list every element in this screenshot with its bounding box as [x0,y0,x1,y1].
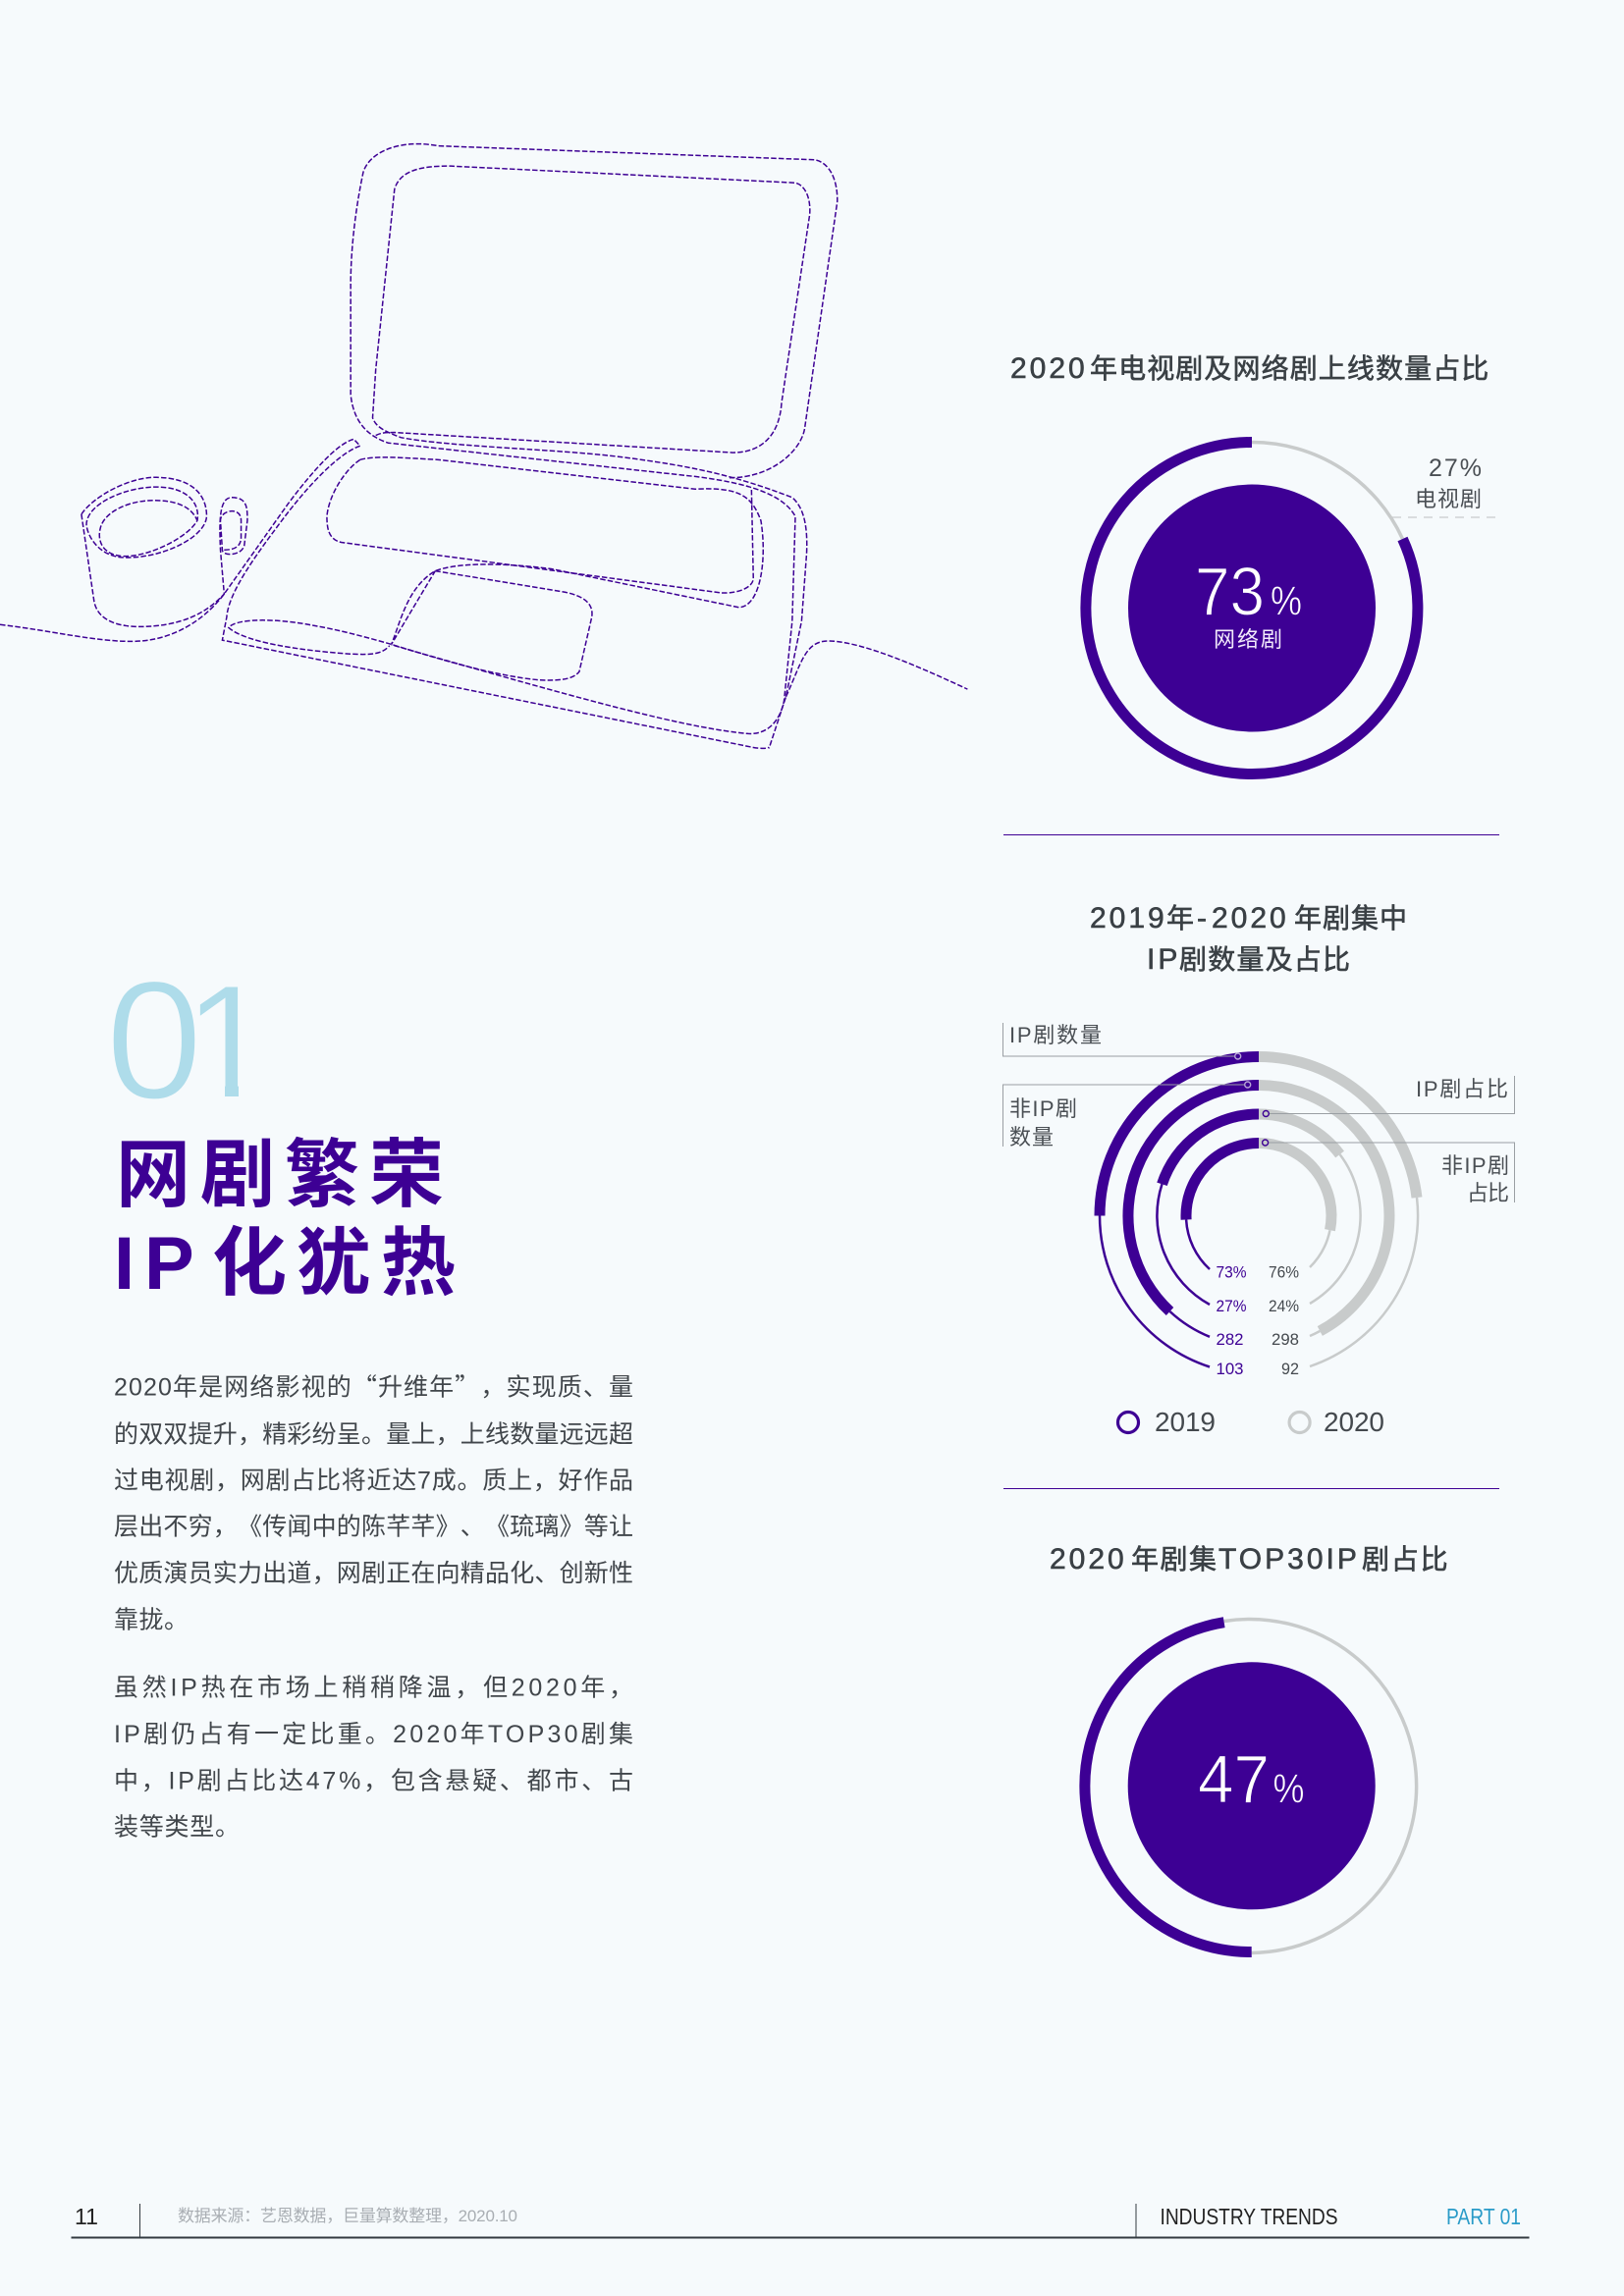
ring chart values 2020: 24% [1269,1297,1299,1315]
paragraph 1: 2020年是网络影视的“升维年”，实现质、量 [114,1368,633,1404]
chart title: IP drama count and share: 年剧集中 [1294,903,1408,934]
heading line 1: 网剧繁荣 [116,1134,444,1217]
footer rule [71,2236,1530,2238]
donut chart: 47% [1085,1620,1417,1953]
heading [114,1134,456,1306]
ring chart labels: 数量 [1009,1125,1054,1149]
concentric ring chart [1003,1023,1514,1366]
ring chart values 2019: 282 [1216,1330,1243,1349]
ring chart labels: IP剧数量 [1009,1023,1102,1047]
body text [114,1368,633,1841]
paragraph 2 [114,1675,633,1841]
paragraph 1: 的双双提升，精彩纷呈。量上，上线数量远远超 [114,1420,633,1448]
ring chart values 2019: 27% [1216,1297,1247,1315]
paragraph 1: 靠拢。 [114,1606,189,1633]
ring: remainder [1224,1620,1417,1953]
section number 01 [106,946,274,1135]
center disc [1128,485,1376,732]
paragraph 1 [114,1368,633,1633]
chart title: IP drama count and share: IP [1147,943,1180,976]
chart title: IP drama count and share: 2020 [1212,902,1289,934]
leader lines and dots [1003,1023,1514,1202]
2020 rings [1259,1056,1418,1366]
paragraph 2: 装等类型。 [114,1813,240,1841]
chart title: TOP30 IP share: 剧占比 [1362,1544,1449,1575]
paragraph 1: 过电视剧，网剧占比将近达7成。质上，好作品 [114,1468,633,1495]
ring chart values 2020: 92 [1281,1360,1299,1378]
section number 01: 0 [106,946,202,1135]
value 47: 47 [1198,1741,1270,1818]
label 网络剧: 网络剧 [1214,627,1282,652]
chart title: IP drama count and share: 2019 [1090,902,1167,934]
part label: PART 01 [1446,2204,1521,2229]
paragraph 1: 优质演员实力出道，网剧正在向精品化、创新性 [114,1560,633,1587]
ring chart values 2020: 76% [1269,1262,1299,1282]
ring chart values 2020: 298 [1272,1330,1299,1349]
page number: 11 [75,2204,98,2229]
paragraph 1: 层出不穷，《传闻中的陈芊芊》、《琉璃》等让 [114,1514,633,1541]
ring chart labels: 非IP剧 [1441,1153,1509,1178]
center disc [1128,1662,1376,1909]
ring chart values 2020 [1269,1262,1299,1378]
ring chart values 2019 [1216,1262,1247,1378]
legend 2019: 2019 [1155,1407,1216,1437]
illustration: dashed line laptop and mug [0,144,967,748]
ring: 27% TV drama [1252,442,1402,539]
chart title: IP drama count and share [1090,902,1408,976]
ring chart labels: 占比 [1467,1181,1509,1205]
ring chart labels: 非IP剧 [1009,1096,1077,1121]
2019 rings [1100,1056,1259,1366]
label 电视剧: 电视剧 [1415,487,1482,511]
value 73: 73 [1195,554,1265,630]
chart title: TV vs web drama: 年电视剧及网络剧上线数量占比 [1090,353,1489,384]
chart title: TOP30 IP share: 2020 [1050,1543,1127,1575]
footer [71,2204,1530,2238]
ring chart values 2019: 73% [1216,1262,1247,1282]
legend [1117,1407,1384,1437]
paragraph 2: 虽然IP热在市场上稍稍降温，但2020年， [114,1675,633,1702]
legend 2020: 2020 [1324,1407,1384,1437]
chart title: IP drama count and share: 年 [1166,903,1195,934]
legend 2020 [1289,1407,1384,1437]
paragraph 2: 中，IP剧占比达47%，包含悬疑、都市、古 [114,1767,633,1794]
donut chart: 73% web drama [1086,442,1482,774]
chart title: TOP30 IP share: TOP30IP [1218,1543,1360,1575]
chart title: IP drama count and share: - [1197,902,1210,934]
data source: 数据来源：艺恩数据，巨量算数整理，2020.10 [178,2207,517,2225]
paragraph 2: IP剧仍占有一定比重。2020年TOP30剧集 [114,1721,633,1748]
ring chart labels: IP剧占比 [1416,1077,1508,1101]
section number 01: 1 [184,951,274,1132]
ring: 47% [1085,1623,1252,1952]
chart title: TOP30 IP share: 年剧集 [1131,1544,1218,1575]
percent sign: % [1271,578,1302,624]
value 27%: 27% [1429,454,1482,482]
ring: 73% web drama [1086,442,1418,774]
section name: INDUSTRY TRENDS [1161,2204,1337,2229]
percent sign: % [1272,1766,1304,1812]
chart title: IP drama count and share: 剧数量及占比 [1179,944,1351,975]
chart title: TV vs web drama: 2020 [1010,352,1088,385]
ring chart labels [1009,1023,1509,1205]
legend 2019 [1117,1407,1216,1437]
ring chart values 2019: 103 [1216,1360,1243,1378]
heading line 2: IP化犹热 [114,1222,456,1306]
